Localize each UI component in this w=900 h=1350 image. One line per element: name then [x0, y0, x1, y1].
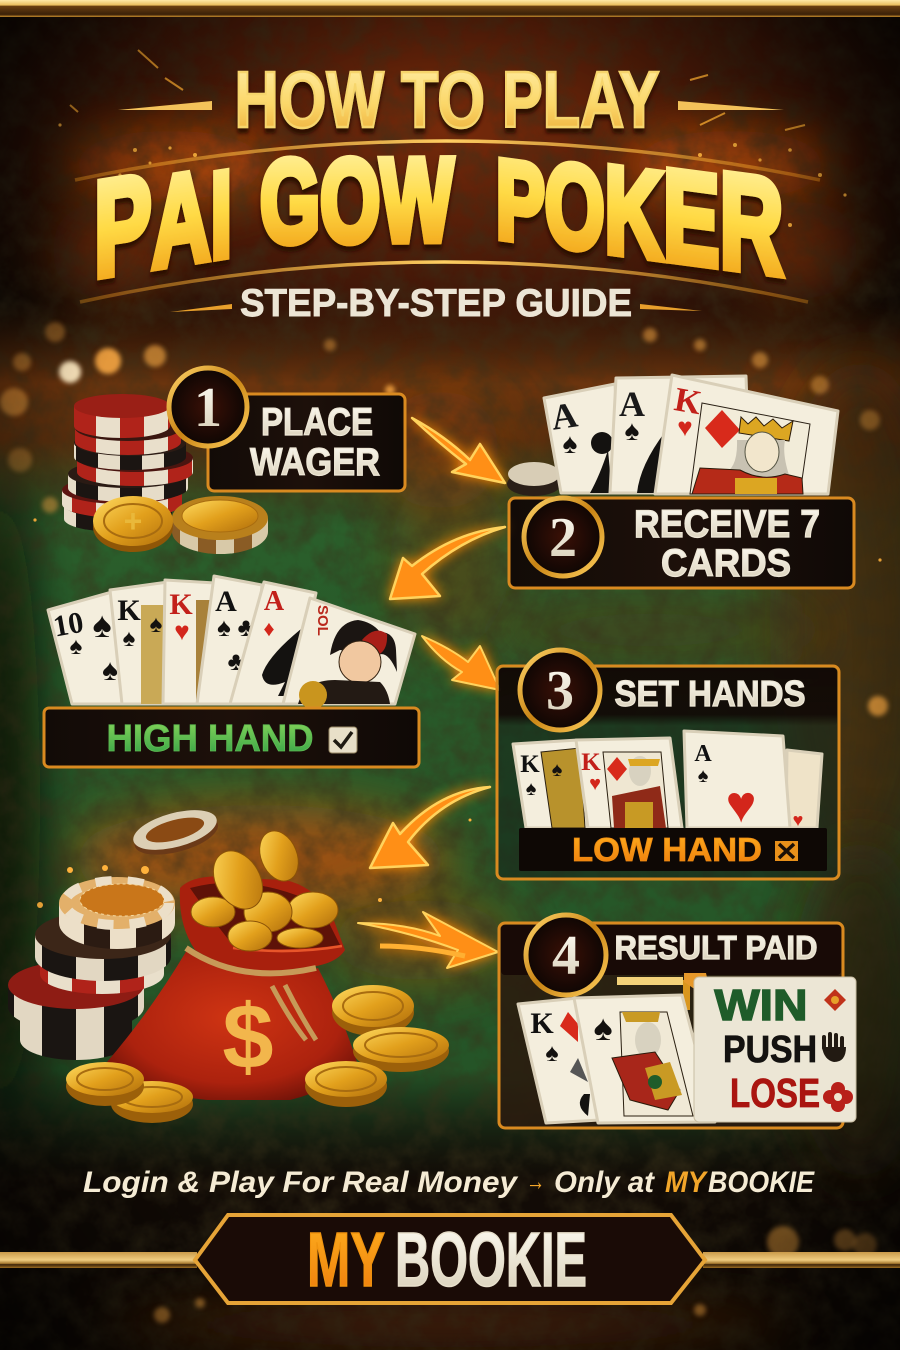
step 3: two-card high hand: ♠ [552, 759, 563, 781]
card: king of spades: K [117, 594, 141, 627]
card: ace of spades [197, 576, 262, 704]
card: ace of spades: A [549, 395, 580, 438]
step 2: number badge: 2 [549, 507, 577, 569]
high hand cards [48, 576, 415, 709]
bottom gold rules [0, 1252, 900, 1268]
step 3 panel: SET HANDS [614, 673, 806, 714]
step 4: number badge: 4 [552, 925, 580, 987]
step 1: number badge [169, 368, 247, 446]
card: ace of spades [544, 384, 622, 493]
card: ace of diamonds: A [264, 586, 285, 617]
step 4: number badge [526, 915, 606, 995]
card: joker [283, 598, 415, 709]
step 2: number badge [524, 498, 602, 576]
step 3: low hand bar [519, 828, 827, 871]
arrow: step 3 to payout [370, 787, 490, 868]
step 3: two-card high hand: K [581, 749, 601, 776]
arrow: high hand to step 3 [422, 636, 500, 690]
step 2: cards [507, 375, 838, 496]
chip stack [8, 877, 175, 1060]
money bag and chips [8, 802, 449, 1123]
high hand panel: HIGH HAND [106, 718, 314, 760]
card: joker: SOL [314, 605, 331, 636]
card: ace of diamonds [230, 582, 316, 704]
step 3: two-card high hand: ♥ [589, 773, 601, 795]
card: ace of spades: ♠ [217, 612, 231, 642]
logo banner: MY [307, 1217, 385, 1303]
step 1: label panel: WAGER [250, 441, 380, 484]
sparks [33, 123, 882, 908]
icon: hand [822, 1034, 846, 1062]
chip behind cards [507, 462, 561, 496]
card: second ace of spades [610, 376, 750, 493]
step 3: two-card high hand: ♠ [526, 778, 537, 800]
footer call to action: BOOKIE [708, 1166, 815, 1199]
icon: check box [329, 727, 357, 753]
card: ace of spades: A [215, 585, 237, 618]
step 1: label panel: PLACE [261, 401, 373, 444]
step 4 panel: RESULT PAID [614, 929, 818, 966]
card: second ace of spades: A [619, 384, 645, 424]
step 3: two-card low hand: A [694, 741, 712, 767]
footer call to action: Only at [554, 1166, 656, 1199]
card: ten of spades: ♠ [70, 633, 83, 660]
title: pai gow poker [94, 115, 784, 307]
step 4: outcome card: PUSH [723, 1029, 817, 1071]
card: ace of spades: ♣ [237, 612, 255, 642]
footer call to action: Login & Play For Real Money [83, 1166, 518, 1199]
footer call to action: MY [665, 1166, 709, 1199]
bokeh lights [0, 322, 888, 1323]
card: king of diamonds [655, 375, 838, 494]
step 3: two-card high hand [513, 738, 682, 828]
step 3: two-card low hand [684, 731, 822, 834]
title side flourishes [118, 101, 784, 110]
subtitle: STEP-BY-STEP GUIDE [240, 282, 632, 325]
arrow: step 2 to high hand [390, 527, 505, 599]
card: king of hearts: K [169, 588, 193, 621]
card: ace of spades: ♠ [563, 428, 578, 459]
step 3: two-card high hand: K [520, 751, 540, 778]
loose coins [66, 985, 449, 1123]
step 3: two-card low hand: ♥ [726, 776, 756, 834]
card: second ace of spades: ♠ [625, 415, 640, 446]
icon: flower [823, 1082, 853, 1112]
card: king of diamonds: ♥ [677, 412, 693, 442]
title: pai gow poker: PAI [94, 133, 232, 307]
card: king of hearts [163, 580, 215, 704]
arrow: step 1 to 2 [412, 418, 505, 483]
step 4: outcome card [694, 977, 856, 1122]
step 3: number badge: 3 [546, 660, 574, 722]
step 2: label panel [509, 498, 854, 588]
arc above main title [75, 141, 820, 180]
card: king of spades: ♠ [123, 625, 136, 652]
card: ace of diamonds: ♦ [263, 616, 275, 641]
card: king of spades: ♠ [150, 611, 163, 638]
coins in bag [191, 825, 338, 951]
step 4: king card [518, 998, 600, 1123]
step 4: jack card: ♠ [593, 1007, 613, 1048]
step 1: chip stack and coins: + [124, 503, 142, 539]
step 1: label panel [208, 394, 405, 491]
card: king of diamonds: K [672, 381, 705, 422]
card: ten of spades: ♠ [92, 604, 112, 645]
top gold border [0, 0, 900, 17]
step 2: label panel: RECEIVE 7 [634, 503, 820, 546]
step 4: king card: ♠ [545, 1039, 559, 1067]
high hand panel [44, 708, 419, 767]
step 3: number badge [520, 650, 600, 730]
logo banner [195, 1215, 705, 1303]
icon: diamond [824, 989, 846, 1011]
card: king of spades [110, 582, 170, 704]
step 4: king card: K [530, 1007, 554, 1040]
step 1: number badge: 1 [194, 377, 222, 439]
step 4 panel [499, 915, 856, 1128]
title: how to play: HOW TO PLAY [234, 55, 660, 144]
step 4: outcome card: LOSE [730, 1070, 820, 1116]
card: ten of spades: ♠ [102, 654, 118, 687]
footer call to action: → [526, 1166, 545, 1196]
step 3: low hand bar: LOW HAND [572, 831, 762, 868]
step 3: two-card low hand: ♥ [793, 810, 803, 830]
card: ten of spades [48, 592, 135, 704]
title: pai gow poker: POKER [496, 115, 784, 304]
red bag [107, 876, 357, 1100]
logo banner: BOOKIE [395, 1217, 587, 1303]
step 2: label panel: CARDS [661, 542, 791, 585]
arrow: payout to step 4 [358, 912, 498, 968]
card: king of hearts: ♥ [174, 616, 190, 646]
step 4: jack card [574, 995, 715, 1123]
flying chip [129, 802, 222, 862]
step 4: outcome card: WIN [714, 981, 808, 1030]
arc below main title [80, 262, 808, 302]
step 3 panel [497, 650, 839, 879]
footer call to action [83, 1166, 815, 1199]
card: ace of spades: ♣ [227, 646, 245, 676]
gold divider [617, 973, 708, 1010]
card: ten of spades: 10 [51, 606, 86, 643]
red bag: $ [222, 986, 274, 1088]
step 3: two-card low hand: ♠ [698, 765, 709, 787]
step 1: chip stack and coins [62, 394, 268, 554]
title: pai gow poker: GOW [260, 135, 454, 268]
